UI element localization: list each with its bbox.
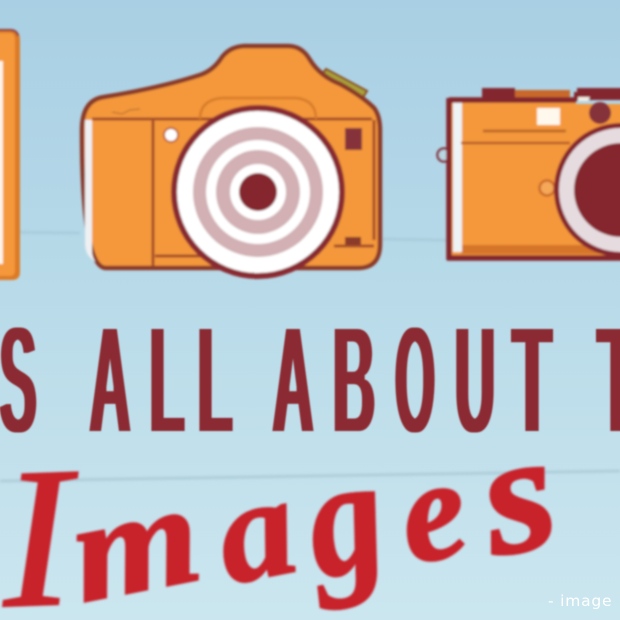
heading: all about the: U xyxy=(455,293,495,466)
caption: image label: - image xyxy=(548,592,612,610)
dslr viewfinder hot shoe xyxy=(318,69,367,102)
compact top buttons xyxy=(482,88,515,98)
dslr body xyxy=(82,46,380,268)
heading: images script: e xyxy=(386,427,479,595)
heading: all about the: A xyxy=(272,294,314,466)
heading: all about the: L xyxy=(150,294,184,466)
dslr indicator xyxy=(164,128,178,142)
compact flash xyxy=(537,108,560,125)
compact body xyxy=(449,100,620,260)
dslr lens xyxy=(171,105,345,279)
heading: images script: a xyxy=(204,444,308,615)
heading: all about the: O xyxy=(395,295,435,467)
compact shutter button xyxy=(589,102,611,124)
icon: DSLR camera xyxy=(82,46,380,279)
dslr square button xyxy=(345,128,362,150)
heading: images script: g xyxy=(288,422,398,613)
compact lens xyxy=(554,123,620,257)
heading: all about the: S xyxy=(0,293,36,466)
icon: compact camera xyxy=(438,88,620,260)
compact left knob xyxy=(438,148,450,162)
compact small dial xyxy=(540,180,554,196)
heading: all about the: B xyxy=(333,294,375,466)
heading: all about the xyxy=(0,293,620,467)
heading: all about the: T xyxy=(512,295,552,467)
heading: images script xyxy=(0,395,570,620)
heading: all about the: L xyxy=(198,294,232,466)
dslr seams xyxy=(92,119,374,266)
heading: images script: s xyxy=(464,395,570,592)
heading: all about the: A xyxy=(89,294,131,466)
icon: phone at left edge xyxy=(0,30,20,280)
